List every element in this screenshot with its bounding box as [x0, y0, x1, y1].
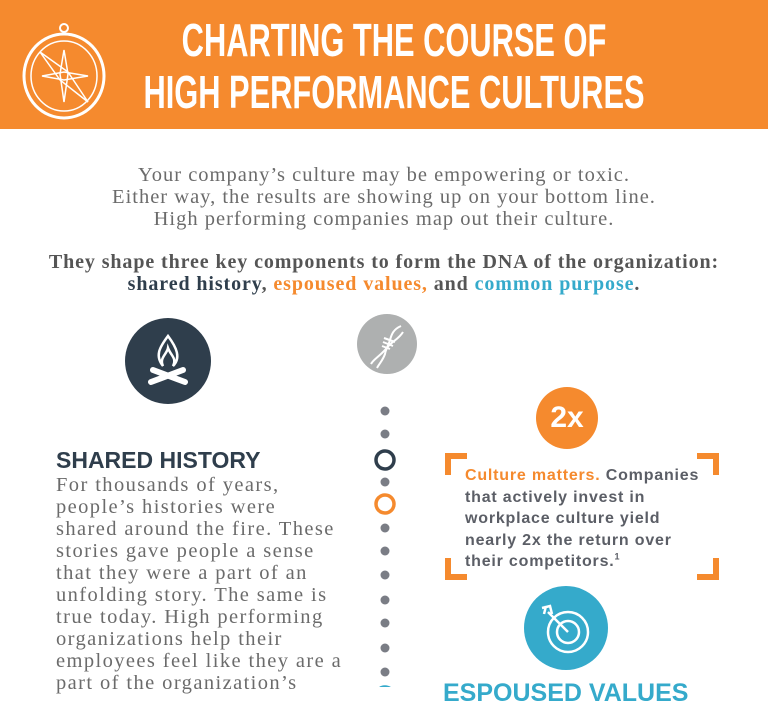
icon: target [524, 586, 608, 670]
body text: organizations help their [56, 628, 283, 650]
timeline dots [374, 406, 396, 687]
title: HIGH PERFORMANCE CULTURES [143, 66, 645, 118]
title [143, 14, 645, 118]
body text [56, 474, 342, 694]
body text: true today. High performing [56, 606, 324, 628]
key components text: They shape three key components to form the DNA of the organization: [49, 251, 719, 273]
body text: shared around the fire. These [56, 518, 335, 540]
callout text: Culture matters. Companies [465, 467, 699, 484]
intro text: Your company’s culture may be empowering or toxic. [138, 164, 630, 186]
title: CHARTING THE COURSE OF [182, 14, 606, 66]
body text: people’s histories were [56, 496, 276, 518]
intro text: Either way, the results are showing up on your bottom line. [112, 186, 656, 208]
body text: employees feel like they are a [56, 650, 342, 672]
icon: campfire [125, 318, 211, 404]
callout text: their competitors.1 [465, 552, 620, 570]
callout text: nearly 2x the return over [465, 532, 672, 548]
body text: stories gave people a sense [56, 540, 315, 562]
icon: compass [22, 23, 106, 120]
callout text: that actively invest in [465, 488, 645, 506]
panel: shared history [56, 447, 342, 694]
icon: dna [357, 314, 417, 374]
body text: that they were a part of an [56, 562, 308, 584]
body text: part of the organization’s [56, 672, 298, 694]
intro text [112, 164, 656, 230]
header banner [0, 0, 768, 129]
body text: For thousands of years, [56, 474, 280, 496]
heading: shared history: SHARED HISTORY [56, 447, 260, 473]
heading: espoused values: ESPOUSED VALUES [443, 679, 688, 707]
body text: unfolding story. The same is [56, 584, 328, 606]
key components text: shared history, espoused values, and common purpose. [128, 273, 640, 295]
intro text: High performing companies map out their culture. [154, 208, 614, 230]
key components text [49, 251, 719, 295]
callout: culture matters [445, 453, 719, 580]
callout text: workplace culture yield [465, 510, 660, 527]
badge: 2x: 2x [550, 401, 584, 434]
callout text [465, 467, 699, 570]
badge: 2x [536, 387, 598, 449]
